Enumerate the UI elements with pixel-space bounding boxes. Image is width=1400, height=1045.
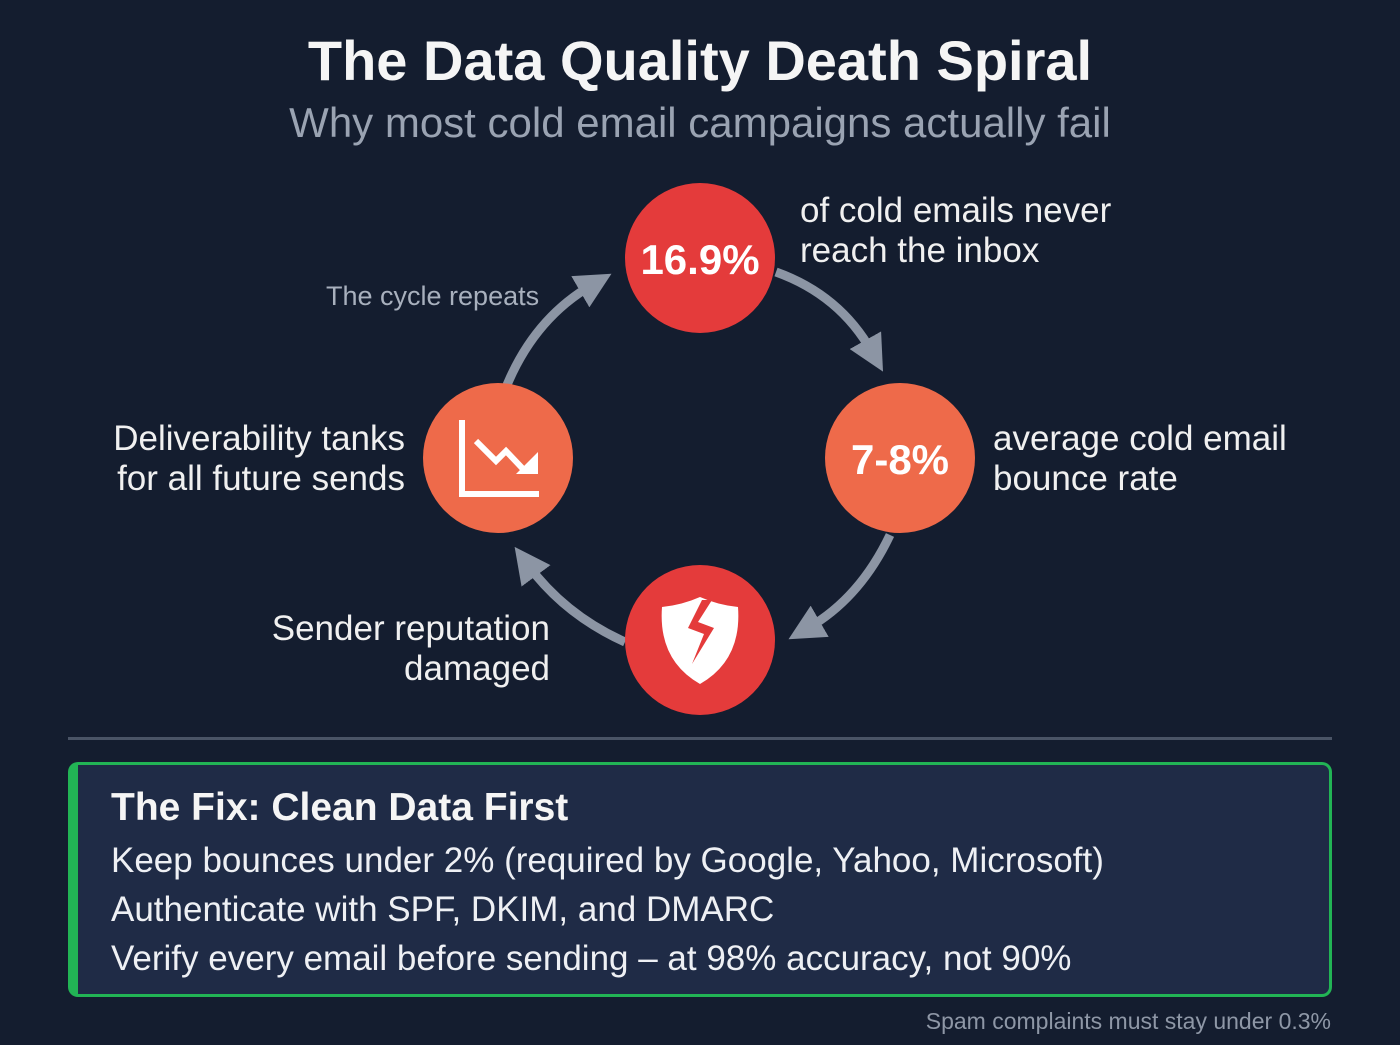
fix list: Authenticate with SPF, DKIM, and DMARC bbox=[111, 890, 774, 929]
label: never reach inbox: reach the inbox bbox=[800, 231, 1039, 270]
fix list bbox=[111, 841, 1104, 978]
fix list: Keep bounces under 2% (required by Google, Yahoo, Microsoft) bbox=[111, 841, 1104, 880]
arrow: right to bottom bbox=[808, 535, 890, 628]
node: 16.9%: 16.9% bbox=[640, 236, 760, 283]
node: 7-8% bbox=[825, 383, 975, 533]
arrow: bottom to left bbox=[528, 565, 625, 642]
label: bounce rate: average cold email bbox=[993, 419, 1287, 458]
label: cycle repeats: The cycle repeats bbox=[326, 281, 539, 311]
panel: the fix bbox=[68, 762, 1332, 997]
label: sender reputation: Sender reputation bbox=[272, 609, 550, 648]
node: shield icon bbox=[625, 565, 775, 715]
label: deliverability bbox=[113, 419, 405, 498]
arrow: top to right bbox=[776, 272, 872, 352]
subtitle: Why most cold email campaigns actually fail bbox=[289, 99, 1111, 146]
label: never reach inbox: of cold emails never bbox=[800, 191, 1111, 230]
cycle diagram bbox=[423, 183, 975, 715]
label: bounce rate bbox=[993, 419, 1287, 498]
node: 7-8%: 7-8% bbox=[851, 436, 949, 483]
footnote: Spam complaints must stay under 0.3% bbox=[926, 1008, 1331, 1034]
label: never reach inbox bbox=[800, 191, 1111, 270]
label: sender reputation: damaged bbox=[404, 649, 550, 688]
node: chart icon bbox=[423, 383, 573, 533]
label: bounce rate: bounce rate bbox=[993, 459, 1178, 498]
label: deliverability: Deliverability tanks bbox=[113, 419, 405, 458]
fix list: Verify every email before sending – at 98% accuracy, not 90% bbox=[111, 939, 1071, 978]
fix heading: The Fix: Clean Data First bbox=[111, 786, 568, 829]
label: sender reputation bbox=[272, 609, 550, 688]
node: 16.9% bbox=[625, 183, 775, 333]
label: deliverability: for all future sends bbox=[117, 459, 405, 498]
arrow: left to top bbox=[507, 285, 592, 385]
title: The Data Quality Death Spiral bbox=[308, 29, 1092, 92]
